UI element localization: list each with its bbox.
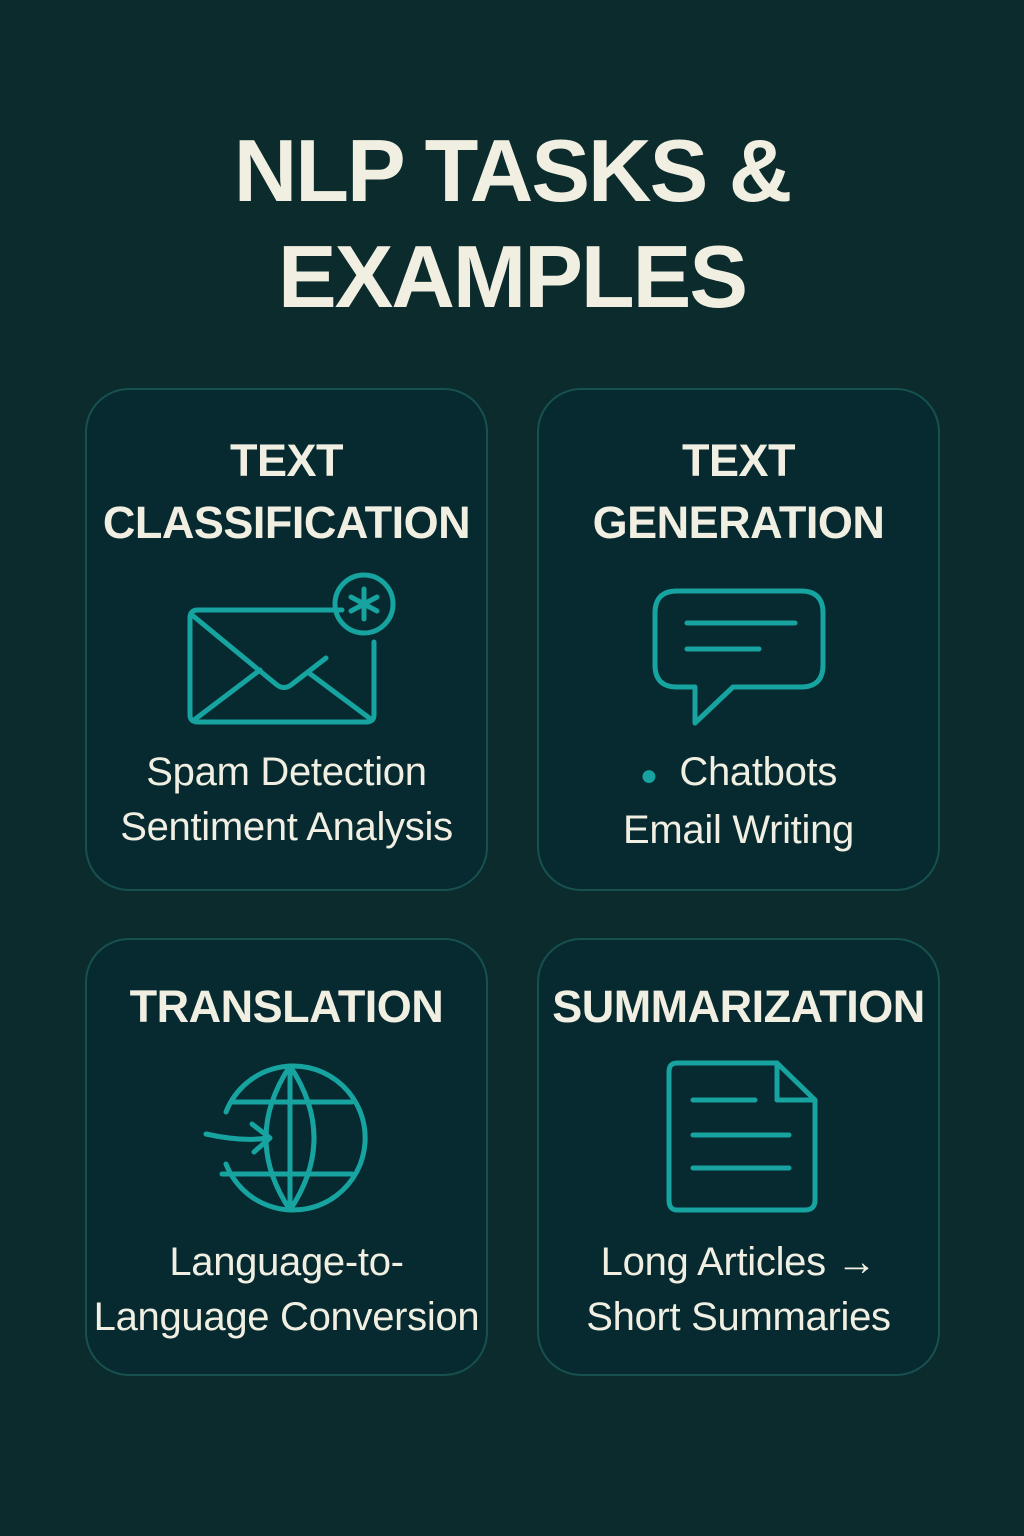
examples text: Short Summaries — [586, 1295, 891, 1339]
examples text — [623, 750, 854, 852]
icon: speech bubble — [652, 588, 826, 726]
examples text: Spam Detection — [146, 750, 427, 794]
heading: TEXT — [682, 435, 795, 486]
examples text — [94, 1240, 479, 1339]
title: EXAMPLES — [278, 227, 746, 326]
heading: TRANSLATION — [130, 981, 443, 1032]
heading: CLASSIFICATION — [103, 497, 470, 548]
panel: summarization — [537, 938, 940, 1376]
examples text — [586, 1240, 891, 1339]
examples text: Language Conversion — [94, 1295, 479, 1339]
heading — [593, 435, 884, 548]
title: NLP TASKS & — [234, 121, 790, 220]
heading: SUMMARIZATION — [552, 981, 925, 1032]
heading: TEXT — [230, 435, 343, 486]
examples text: Long Articles → — [601, 1240, 876, 1284]
panel: text classification — [85, 388, 488, 891]
examples text: Sentiment Analysis — [120, 805, 453, 849]
panel: text generation — [537, 388, 940, 891]
examples text: ● Chatbots — [640, 750, 837, 794]
examples text — [120, 750, 453, 849]
icon: globe with arrow — [204, 1064, 368, 1212]
examples text: Language-to- — [169, 1240, 404, 1284]
examples text: Email Writing — [623, 808, 854, 852]
heading — [103, 435, 470, 548]
icon: envelope with badge — [188, 572, 396, 724]
heading: GENERATION — [593, 497, 884, 548]
title — [234, 121, 790, 326]
icon: document — [666, 1060, 818, 1212]
panel: translation — [85, 938, 488, 1376]
